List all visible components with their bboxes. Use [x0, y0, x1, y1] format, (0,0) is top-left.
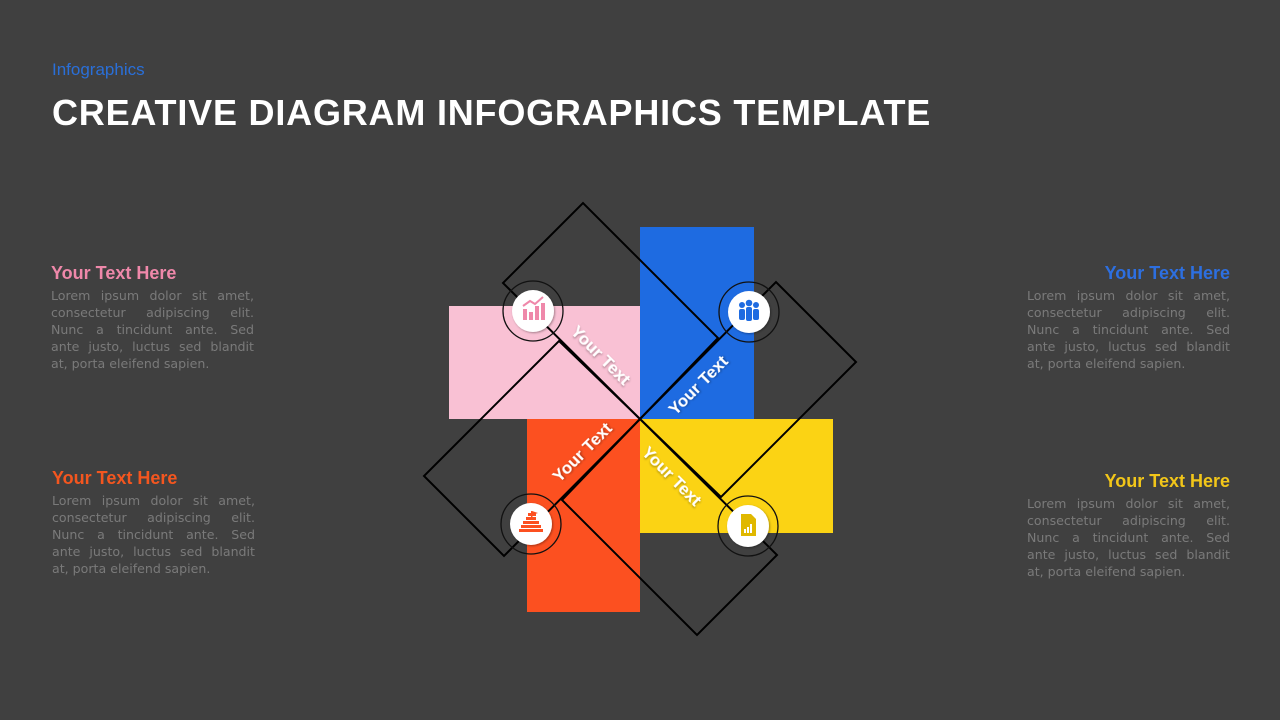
rect: blue	[640, 227, 754, 419]
text block: yellow: Lorem ipsum dolor sit amet,	[1027, 496, 1230, 511]
text block: blue: Your Text Here	[1105, 263, 1230, 283]
text block: yellow: Nunc a tincidunt ante. Sed	[1027, 530, 1230, 545]
text block: pink: Your Text Here	[51, 263, 176, 283]
title: CREATIVE DIAGRAM INFOGRAPHICS TEMPLATE	[52, 92, 931, 133]
text block: pink: at, porta eleifend sapien.	[51, 356, 209, 371]
text block: yellow: at, porta eleifend sapien.	[1027, 564, 1185, 579]
text block: pink: ante justo, luctus sed blandit	[51, 339, 254, 354]
text block: blue: Lorem ipsum dolor sit amet,	[1027, 288, 1230, 303]
text block: orange: Nunc a tincidunt ante. Sed	[52, 527, 255, 542]
text block: pink: Nunc a tincidunt ante. Sed	[51, 322, 254, 337]
rect: yellow	[640, 419, 833, 533]
subtitle: Infographics	[52, 60, 145, 79]
text block: yellow	[1027, 471, 1230, 579]
label: orange: Your Text	[549, 419, 616, 486]
text block: yellow: consectetur adipiscing elit.	[1027, 513, 1230, 528]
outlines	[424, 203, 856, 635]
text block: orange: ante justo, luctus sed blandit	[52, 544, 255, 559]
text block: pink: Lorem ipsum dolor sit amet,	[51, 288, 254, 303]
label: pink: Your Text	[567, 322, 634, 389]
text block: orange	[52, 468, 255, 576]
text block: orange: at, porta eleifend sapien.	[52, 561, 210, 576]
text block: blue: ante justo, luctus sed blandit	[1027, 339, 1230, 354]
text block: yellow: Your Text Here	[1105, 471, 1230, 491]
text block: blue: consectetur adipiscing elit.	[1027, 305, 1230, 320]
label: blue: Your Text	[665, 352, 732, 419]
rect: orange	[527, 419, 640, 612]
icon: chart	[503, 281, 563, 341]
icon: pyramid flag	[501, 494, 561, 554]
text block: yellow: ante justo, luctus sed blandit	[1027, 547, 1230, 562]
text block: pink	[51, 263, 254, 371]
rect: pink	[449, 306, 640, 419]
text block: blue: Nunc a tincidunt ante. Sed	[1027, 322, 1230, 337]
icon: people	[719, 282, 779, 342]
text block: orange: Your Text Here	[52, 468, 177, 488]
text block: blue	[1027, 263, 1230, 371]
label: yellow: Your Text	[638, 443, 705, 510]
icon: document	[718, 496, 778, 556]
text block: pink: consectetur adipiscing elit.	[51, 305, 254, 320]
text block: blue: at, porta eleifend sapien.	[1027, 356, 1185, 371]
text block: orange: consectetur adipiscing elit.	[52, 510, 255, 525]
text block: orange: Lorem ipsum dolor sit amet,	[52, 493, 255, 508]
